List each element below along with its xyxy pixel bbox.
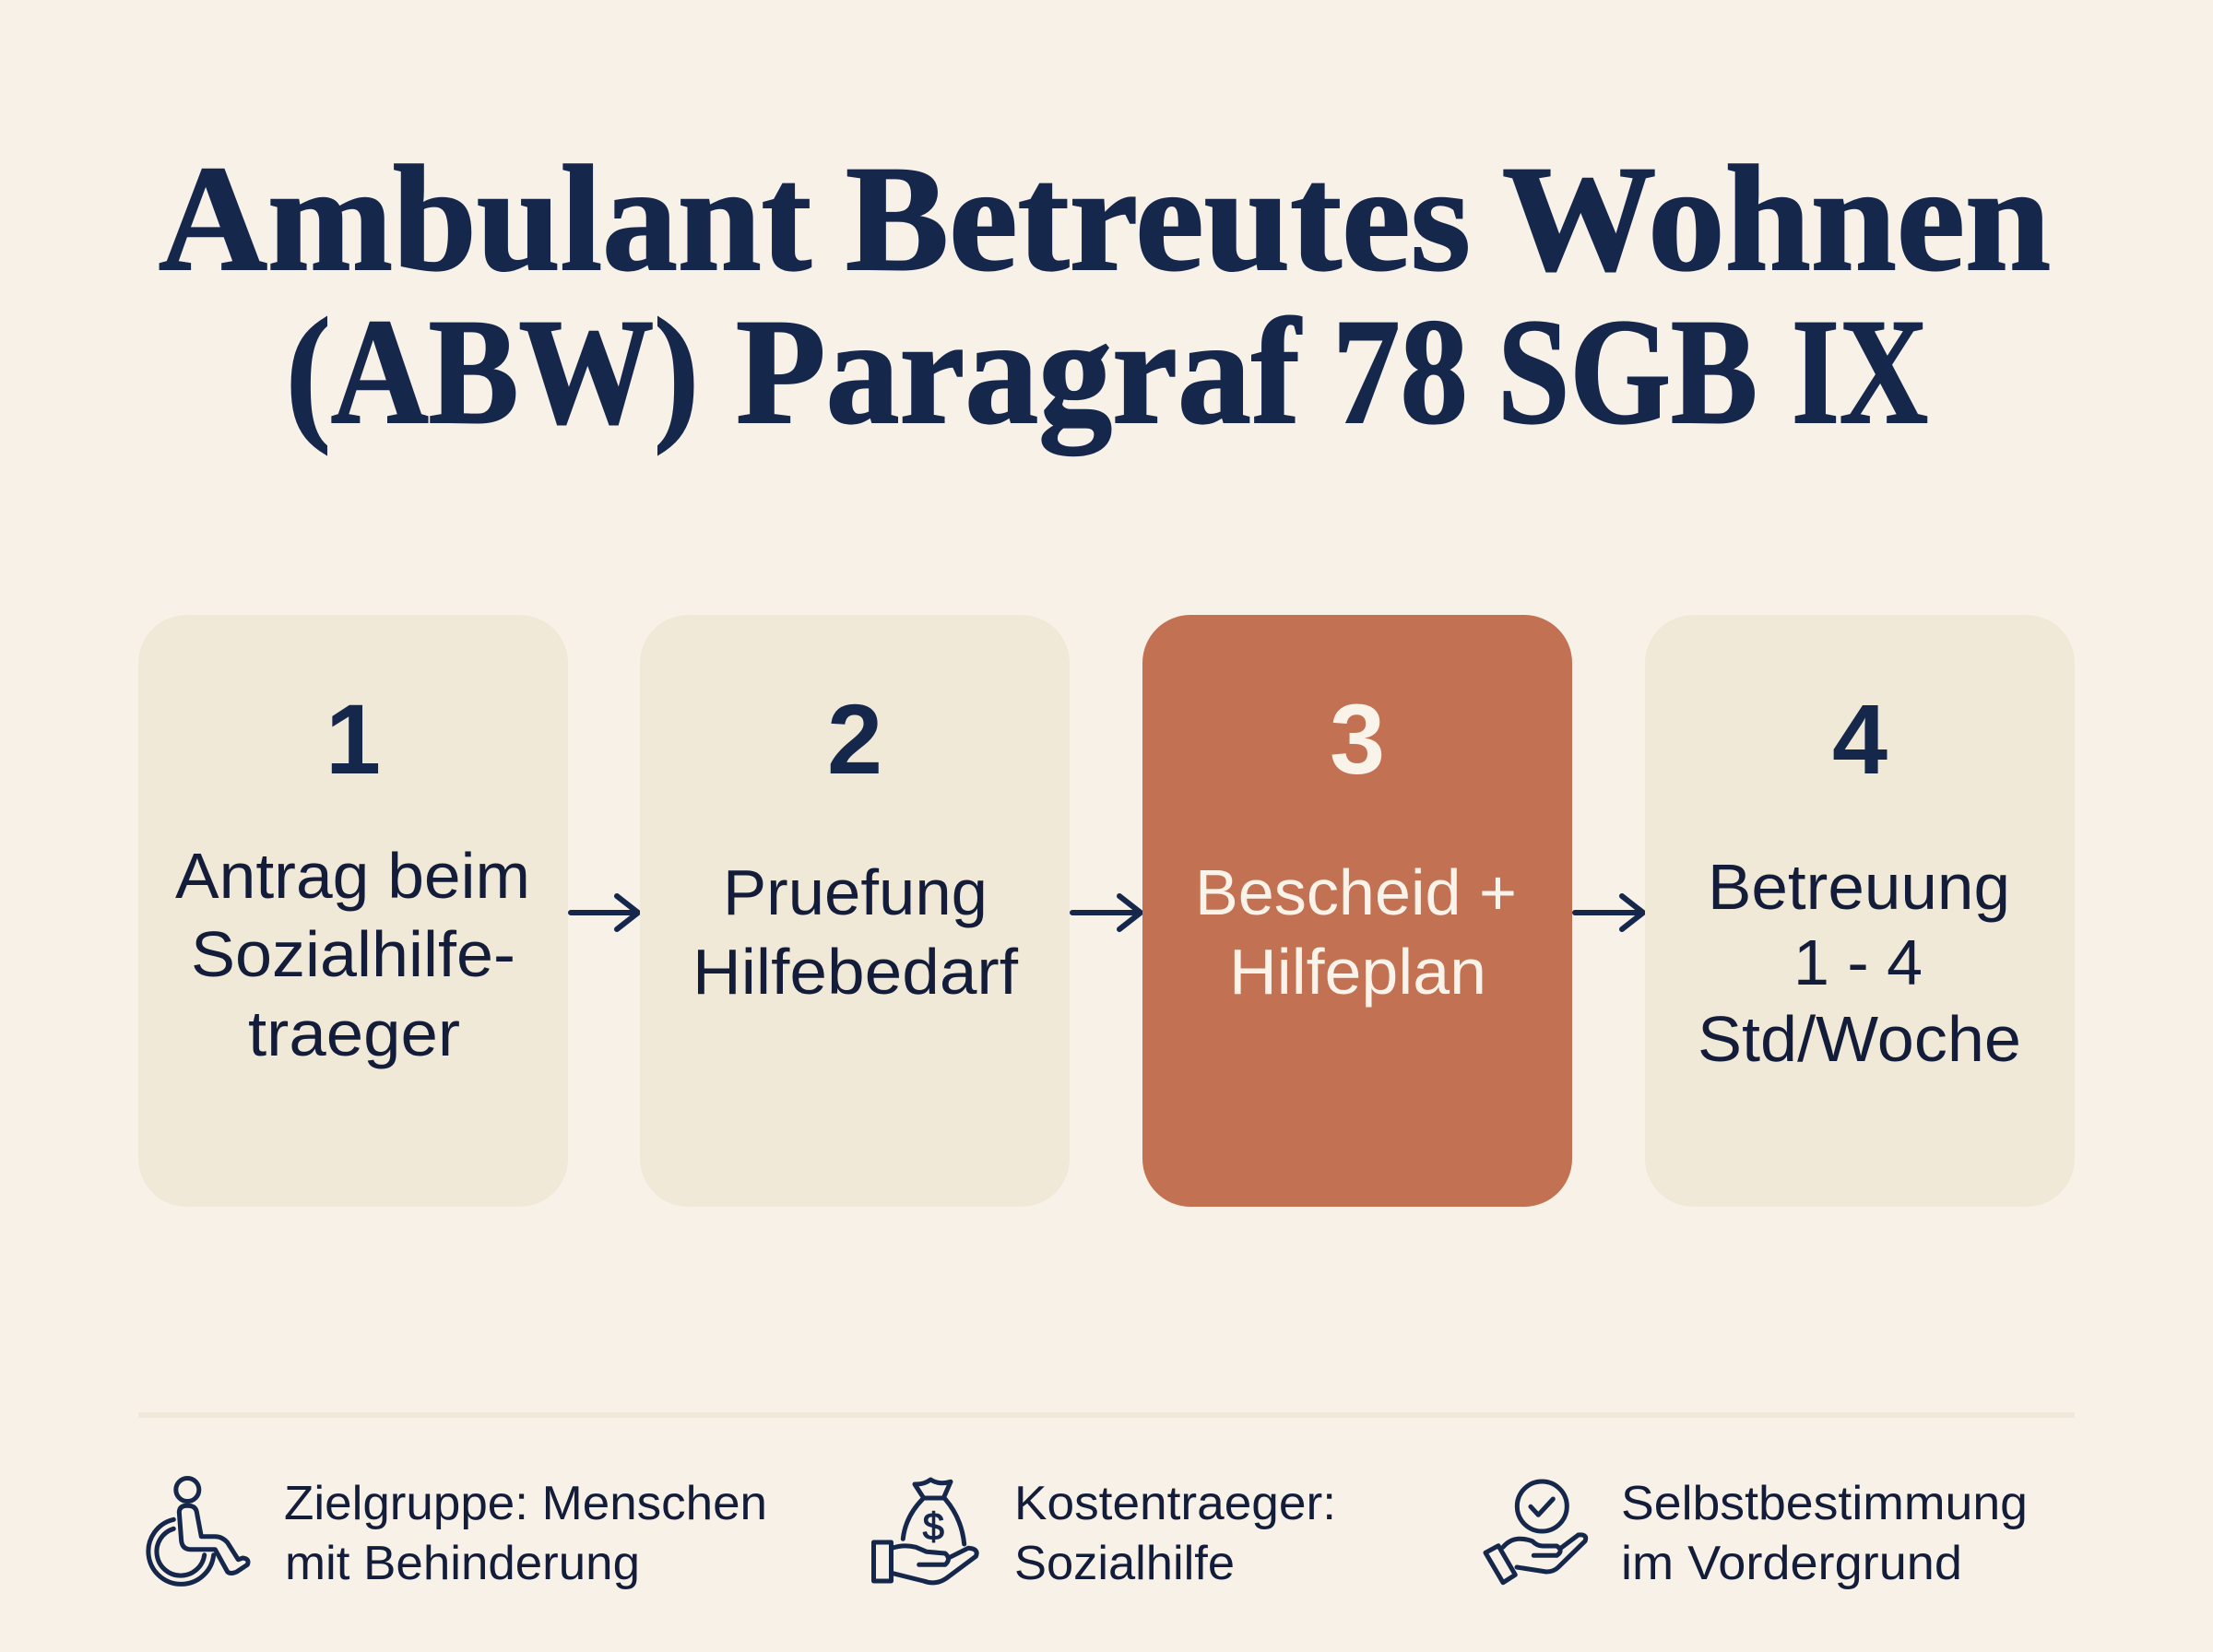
text: cost bearer: Sozialhilfe bbox=[1014, 1537, 1235, 1590]
title: Wohnen bbox=[1502, 136, 2051, 302]
icon: wheelchair bbox=[148, 1479, 248, 1584]
panel: step 3 highlighted bbox=[1142, 615, 1572, 1207]
icon: money bag in hand: $ bbox=[923, 1504, 944, 1548]
text: target group: mit Behinderung bbox=[285, 1537, 640, 1590]
panel: step 4 bbox=[1645, 615, 2075, 1207]
arrow: step 2 to 3 bbox=[1072, 896, 1141, 929]
panel: step 2: 2 bbox=[827, 683, 882, 795]
text: cost bearer bbox=[1014, 1477, 1336, 1590]
title bbox=[159, 136, 2051, 455]
panel: step 1: 1 bbox=[325, 683, 381, 795]
panel: step 3 highlighted: Bescheid + bbox=[1195, 856, 1517, 928]
panel: step 4: 4 bbox=[1832, 683, 1888, 795]
panel: step 2: Hilfebedarf bbox=[692, 936, 1019, 1008]
title: SGB bbox=[1497, 289, 1757, 455]
title: 78 bbox=[1332, 289, 1468, 455]
text: target group bbox=[284, 1477, 767, 1590]
text: self-determination: im Vordergrund bbox=[1621, 1537, 1962, 1590]
panel: step 4: Std/Woche bbox=[1698, 1003, 2021, 1075]
icon: money bag in hand bbox=[874, 1480, 976, 1583]
title: IX bbox=[1792, 289, 1928, 455]
arrow: step 1 to 2 bbox=[571, 896, 638, 929]
panel: step 3 highlighted: Hilfeplan bbox=[1229, 936, 1486, 1008]
panel: step 2: Pruefung bbox=[723, 856, 988, 928]
panel: step 2 bbox=[640, 615, 1070, 1207]
title: Ambulant bbox=[159, 136, 811, 302]
title: (ABW) bbox=[286, 289, 699, 455]
title: Paragraf bbox=[736, 289, 1302, 455]
panel: step 4: 1 - 4 bbox=[1793, 926, 1923, 998]
panel: step 1 bbox=[138, 615, 568, 1207]
text: self-determination bbox=[1621, 1477, 2028, 1590]
text: self-determination: Selbstbestimmung bbox=[1621, 1477, 2028, 1530]
panel: step 1: Sozialhilfe- bbox=[191, 918, 515, 990]
panel: step 1: traeger bbox=[248, 997, 460, 1069]
text: target group: Zielgruppe: Menschen bbox=[284, 1477, 767, 1530]
panel: step 1: Antrag beim bbox=[175, 840, 530, 912]
text: cost bearer: Kostentraeger: bbox=[1014, 1477, 1336, 1530]
panel: step 4: Betreuung bbox=[1708, 851, 2010, 923]
title: Betreutes bbox=[846, 136, 1471, 302]
icon: hand with check bbox=[1485, 1481, 1586, 1583]
arrow: step 3 to 4 bbox=[1575, 896, 1643, 929]
panel: step 3 highlighted: 3 bbox=[1330, 683, 1385, 795]
